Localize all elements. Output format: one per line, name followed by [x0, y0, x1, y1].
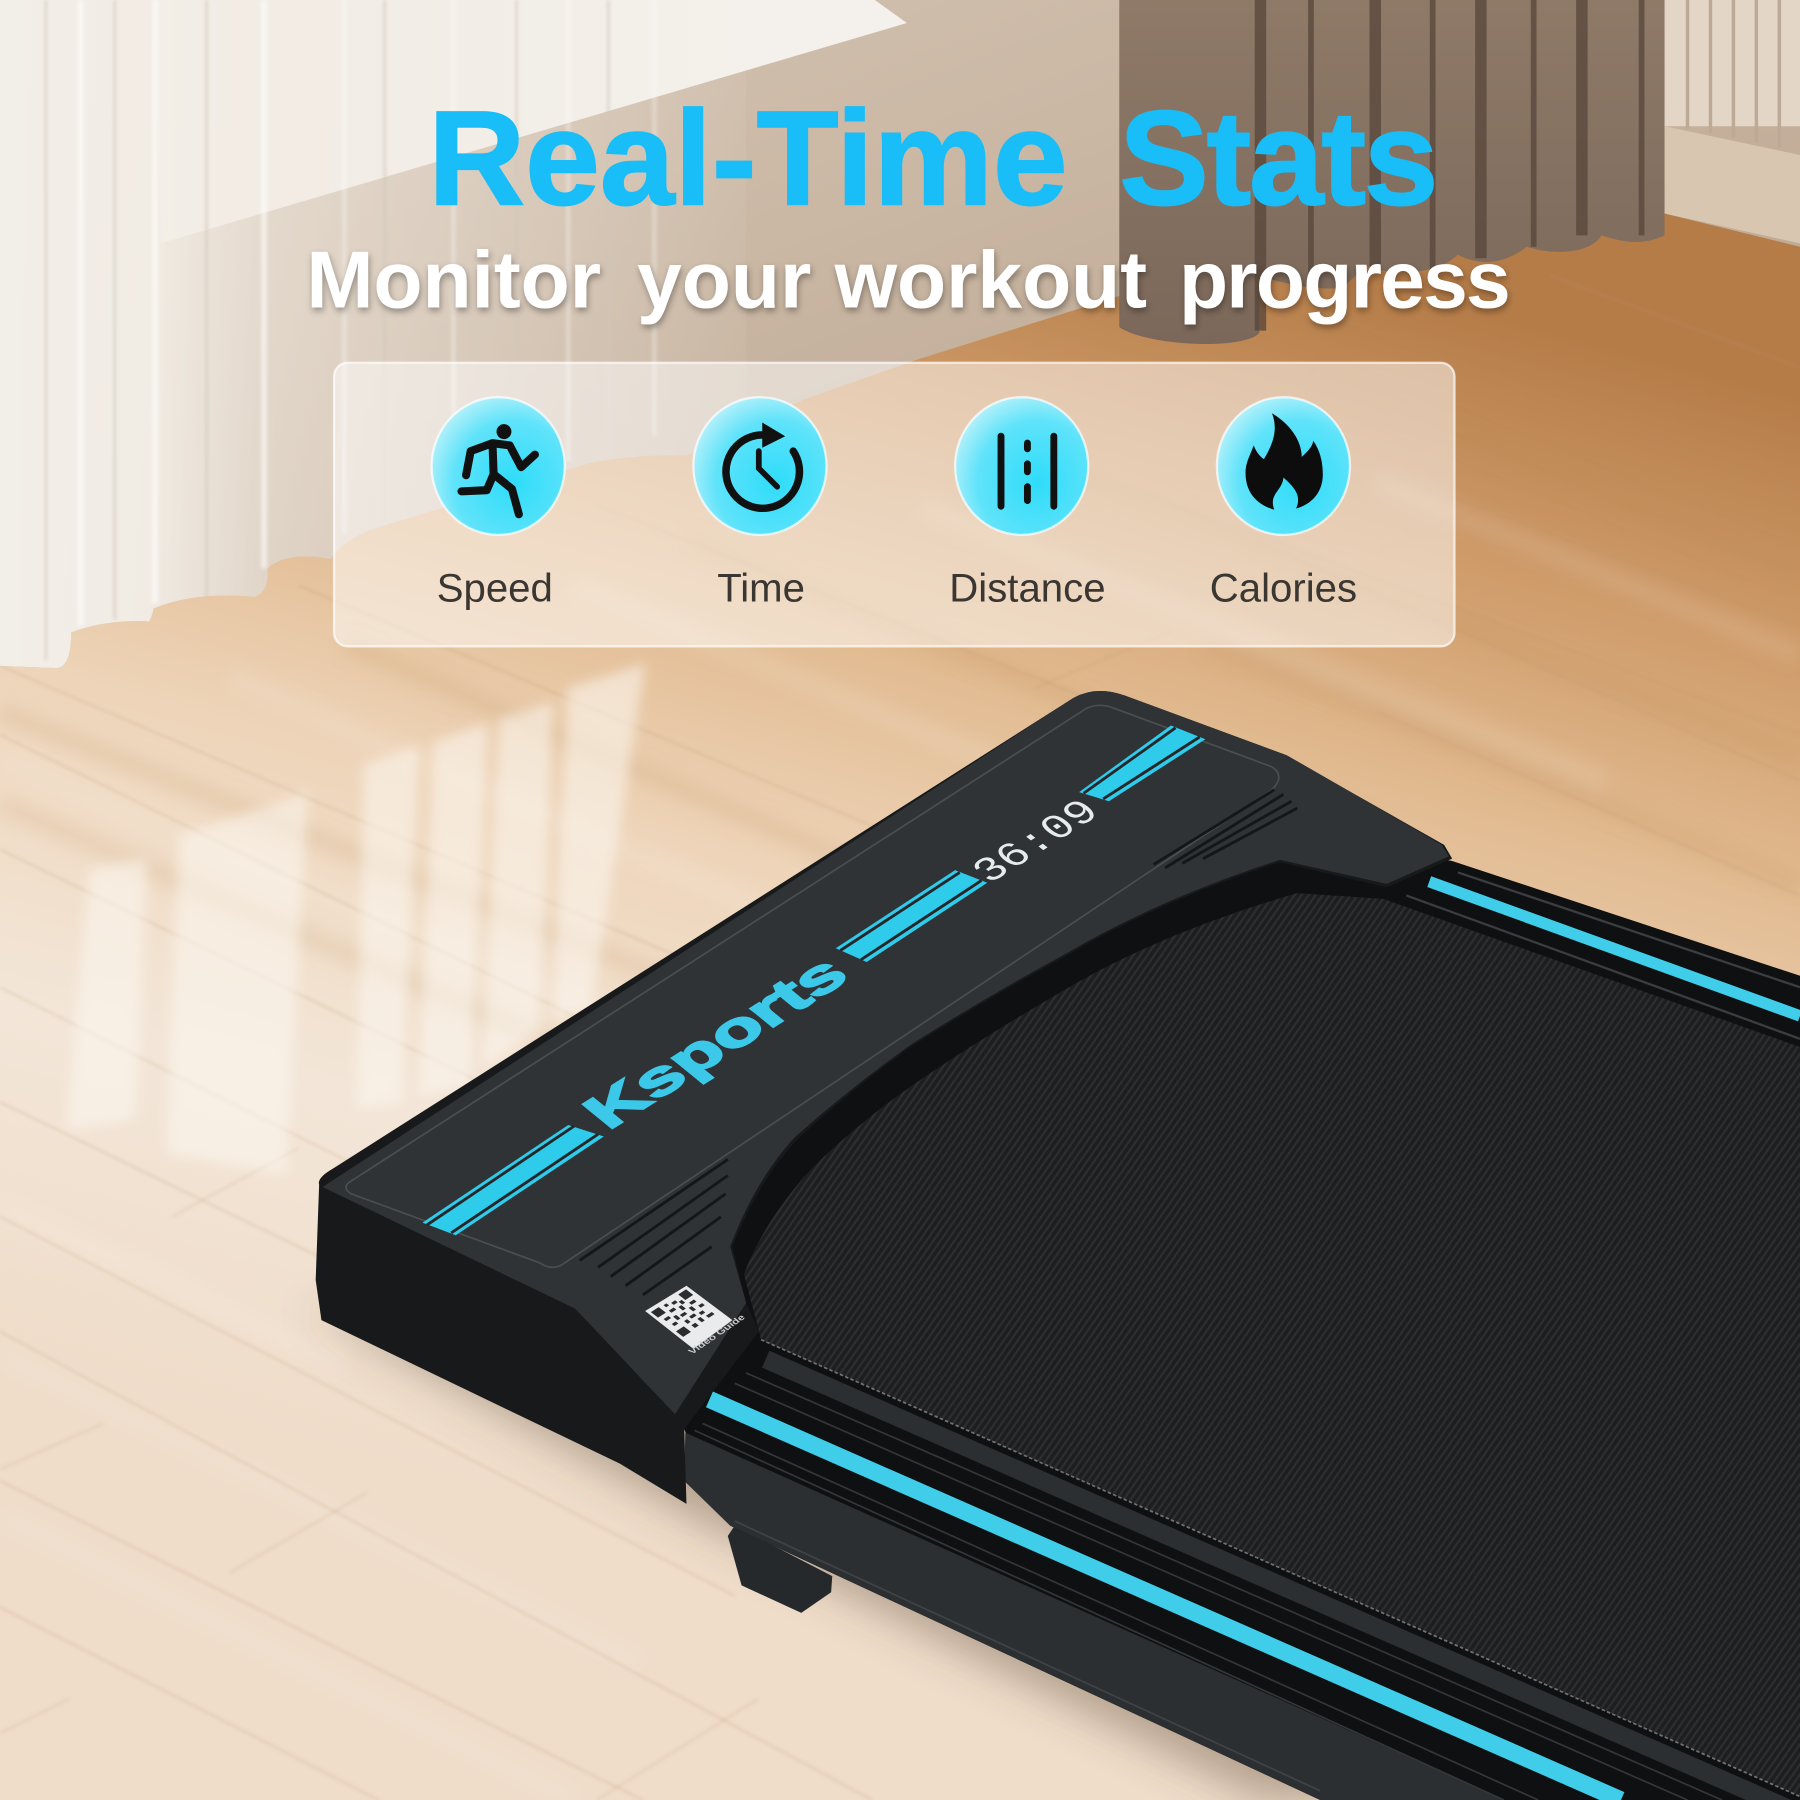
- window reflection on floor: [67, 664, 645, 1174]
- support foot: [728, 1526, 832, 1613]
- wall: [0, 0, 1800, 668]
- blue stripe middle: [836, 870, 987, 962]
- icon: time clock: [693, 397, 827, 535]
- digital time display: 36:09: [964, 793, 1112, 892]
- stat: calories: [1210, 397, 1357, 611]
- subtitle: your: [637, 236, 811, 326]
- sheer curtain: [0, 0, 746, 668]
- skirting and radiator: [1665, 0, 1800, 126]
- label: distance: Distance: [949, 566, 1106, 611]
- treadmill: [310, 691, 1800, 1800]
- floor shadow: [310, 1309, 1665, 1800]
- blue stripe right: [1079, 726, 1205, 801]
- icon: distance track: [955, 397, 1088, 535]
- stat: speed: [432, 397, 565, 611]
- subtitle: Monitor: [307, 236, 601, 326]
- blue stripe left: [422, 1125, 604, 1235]
- speaker vents right: [1154, 790, 1297, 868]
- brown drapes: [1119, 0, 1665, 344]
- subtitle: progress: [1179, 236, 1509, 326]
- side rail far: [1406, 872, 1800, 1039]
- icon: calories flame: [1217, 397, 1350, 535]
- label: calories: Calories: [1210, 566, 1357, 611]
- motor hood body: [316, 691, 1452, 1504]
- subtitle: workout: [834, 236, 1147, 326]
- belt lower edge highlight: [761, 1340, 1800, 1797]
- stats glass panel: [334, 363, 1454, 646]
- stat: time: [693, 397, 827, 611]
- brand logo: Ksports: [570, 947, 861, 1138]
- QR code sticker: Video Guide: [687, 1313, 748, 1356]
- stat: distance: [949, 397, 1106, 611]
- QR code sticker: [645, 1286, 748, 1356]
- title: Stats: [1119, 83, 1436, 233]
- speaker vents left: [580, 1159, 728, 1295]
- deck base: [684, 827, 1800, 1800]
- side rail near: [684, 1359, 1800, 1800]
- label: speed: Speed: [437, 566, 553, 611]
- label: time: Time: [717, 566, 805, 611]
- hood top surface: [323, 691, 1449, 1414]
- window light: [155, 0, 907, 243]
- icon: speed runner: [432, 397, 565, 535]
- running belt: [744, 893, 1800, 1797]
- title: Real-Time: [428, 83, 1068, 233]
